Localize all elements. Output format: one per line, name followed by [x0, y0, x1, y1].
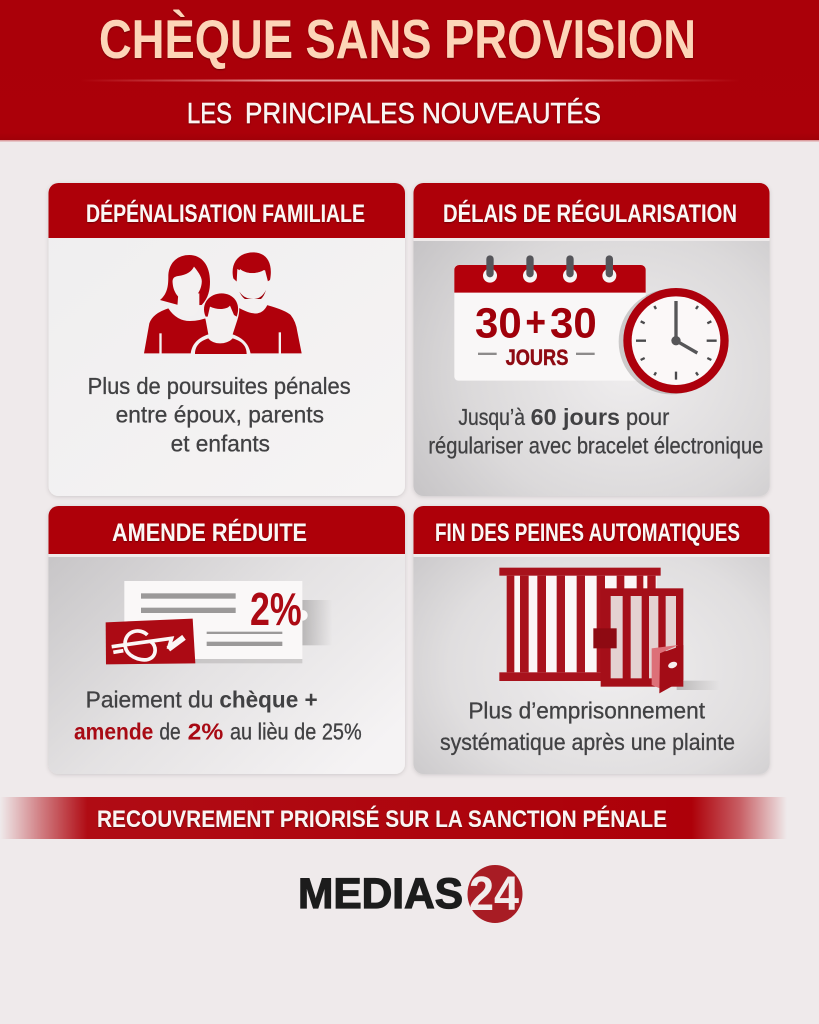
panel: délais de régularisation — [414, 183, 770, 496]
father body — [207, 305, 302, 353]
description: 60 jours — [531, 404, 620, 430]
father head — [233, 252, 271, 282]
icon: calendar: 30 — [475, 300, 522, 348]
logo: Medias24: 24 — [469, 868, 519, 921]
cheque — [124, 581, 302, 659]
heading: AMENDE RÉDUITE — [112, 518, 307, 547]
door — [593, 588, 683, 693]
icon: clock — [619, 288, 729, 394]
icon: calendar — [454, 255, 646, 381]
icon: calendar: 30 — [550, 300, 597, 348]
description: chèque + — [219, 686, 318, 712]
description — [74, 686, 362, 744]
bottom banner — [0, 797, 795, 839]
description: entre époux, parents — [116, 402, 324, 428]
description — [88, 373, 351, 457]
description: systématique après une plainte — [440, 729, 735, 755]
subtitle: PRINCIPALES NOUVEAUTÉS — [245, 97, 601, 130]
panel: amende réduite — [48, 506, 405, 774]
heading: DÉPÉNALISATION FAMILIALE — [86, 199, 365, 228]
icon: prison cell with open door — [499, 568, 720, 693]
subtitle: LES — [187, 98, 232, 130]
mother body — [144, 308, 227, 353]
child head — [204, 293, 238, 317]
description: 2% — [188, 718, 224, 744]
description: de — [159, 718, 181, 744]
mother hair — [160, 255, 210, 306]
description: Jusqu’à — [458, 404, 525, 430]
panel: dépénalisation familiale — [48, 183, 405, 496]
description — [440, 697, 735, 755]
description: Plus de poursuites pénales — [88, 373, 351, 399]
logo: Medias24: MEDIAS — [298, 870, 463, 918]
icon: calendar: JOURS — [506, 345, 568, 370]
heading: DÉLAIS DE RÉGULARISATION — [443, 199, 737, 228]
child body — [195, 338, 247, 354]
description: Paiement du — [86, 686, 213, 712]
description: Plus d’emprisonnement — [468, 697, 705, 723]
title: CHÈQUE SANS PROVISION — [99, 8, 696, 70]
description: pour — [626, 404, 670, 430]
icon: calendar: + — [525, 298, 546, 346]
header banner — [0, 0, 819, 142]
icon: family — [144, 252, 302, 354]
description: régulariser avec bracelet électronique — [428, 432, 763, 458]
panel: fin des peines automatiques — [414, 506, 770, 774]
description: au lièu de 25% — [230, 718, 362, 744]
logo: Medias24 — [298, 865, 522, 923]
description: amende — [74, 718, 153, 744]
child halo — [191, 290, 251, 354]
banner text: RECOUVREMENT PRIORISÉ SUR LA SANCTION PÉNALE — [97, 805, 667, 833]
description: et enfants — [171, 431, 270, 457]
icon: cheque with stamp — [106, 581, 332, 664]
stamp — [106, 619, 195, 664]
icon: cheque with stamp: 2% — [250, 583, 302, 635]
description — [428, 404, 763, 458]
icon: calendar and clock — [454, 255, 729, 394]
